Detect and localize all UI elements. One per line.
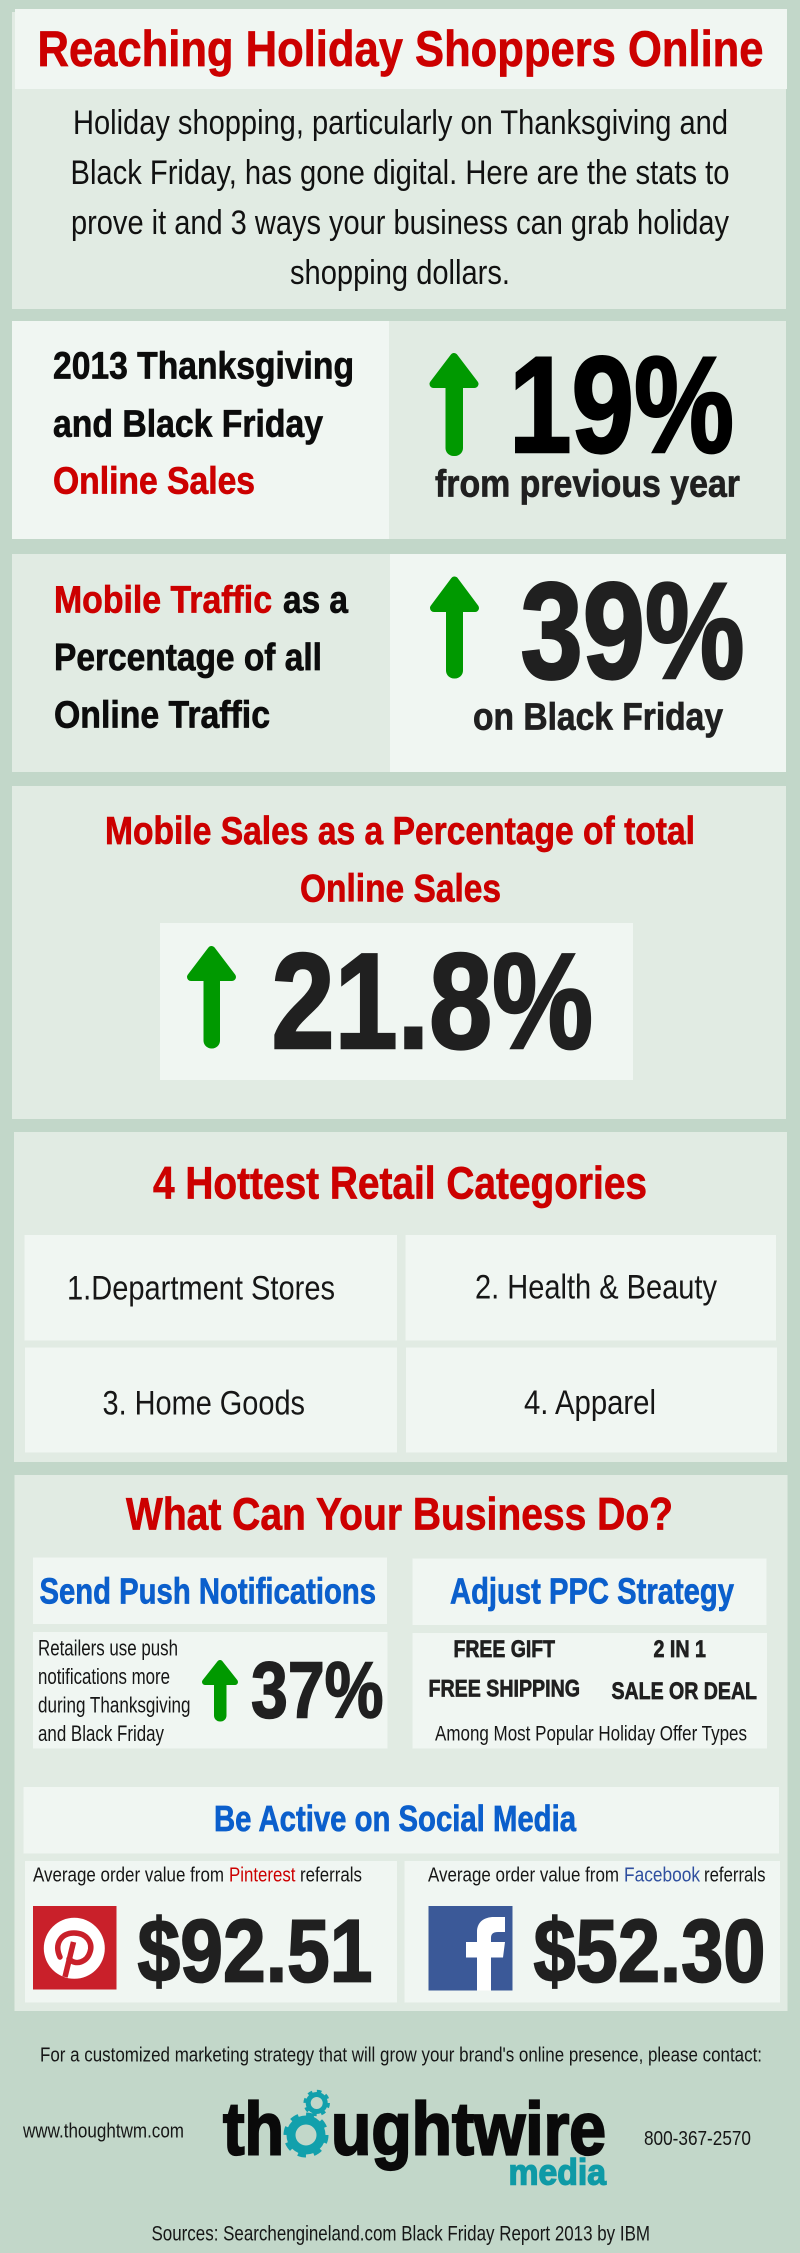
push notification text: Retailers use push [38, 1636, 178, 1660]
section heading: What Can Your Business Do? [126, 1488, 673, 1540]
pinterest caption [33, 1864, 362, 1886]
category: department stores: 1.Department Stores [67, 1270, 335, 1308]
mobile traffic label: as a [283, 580, 349, 622]
panel: online sales stat [12, 321, 786, 539]
icon: up arrow [434, 357, 474, 456]
stat: facebook value: $52.30 [534, 1900, 766, 2000]
pinterest caption: Average order value from [33, 1864, 224, 1886]
stat: 19%: 19% [509, 329, 734, 482]
stat caption: on Black Friday [473, 696, 723, 738]
panel: mobile sales stat [12, 786, 786, 1119]
online sales label: and Black Friday [53, 404, 323, 446]
sub-heading: push notifications [33, 1558, 387, 1624]
stat caption: from previous year [435, 464, 740, 506]
card: pinterest [25, 1861, 397, 2002]
categories heading: 4 Hottest Retail Categories [153, 1158, 647, 1208]
push notification text [38, 1636, 190, 1746]
panel: title and intro [12, 9, 787, 309]
mobile traffic label: Mobile Traffic [54, 580, 272, 622]
icon: small gear [305, 2092, 328, 2114]
mobile sales heading [105, 810, 695, 910]
mobile sales heading: Online Sales [300, 868, 501, 910]
intro text: shopping dollars. [290, 254, 510, 292]
stat: 37%: 37% [251, 1646, 384, 1734]
facebook caption: Average order value from [428, 1864, 619, 1886]
push notification text: and Black Friday [38, 1721, 164, 1746]
icon: up arrow [205, 1663, 235, 1722]
panel: what can your business do [14, 1475, 788, 2011]
card: offer types: FREE GIFT [454, 1636, 555, 1663]
pinterest caption: Pinterest [229, 1864, 296, 1886]
facebook caption: referrals [704, 1864, 766, 1886]
push notification text: notifications more [38, 1664, 170, 1689]
card: offer types: FREE SHIPPING [428, 1676, 580, 1702]
logo: thoughtwire media: media [508, 2152, 607, 2192]
icon: up arrow [191, 950, 232, 1048]
facebook caption [428, 1864, 766, 1886]
footer: website: www.thoughtwm.com [22, 2120, 184, 2142]
panel: mobile traffic stat [12, 554, 786, 772]
category: health and beauty: 2. Health & Beauty [475, 1268, 717, 1306]
mobile traffic label: Online Traffic [54, 694, 270, 736]
category: home goods [25, 1348, 397, 1452]
card: offer types: SALE OR DEAL [612, 1678, 757, 1705]
panel: retail categories [14, 1132, 787, 1462]
category: apparel [406, 1348, 777, 1452]
pinterest caption: referrals [300, 1864, 362, 1886]
category: department stores [24, 1235, 397, 1340]
category: home goods: 3. Home Goods [102, 1384, 305, 1422]
category: apparel: 4. Apparel [524, 1384, 656, 1422]
icon: large gear [286, 2115, 326, 2155]
footer: phone: 800-367-2570 [644, 2128, 751, 2150]
sub-heading: social media [24, 1787, 779, 1854]
mobile traffic label [54, 580, 349, 736]
card: push notification stat [33, 1632, 388, 1748]
mobile traffic label: Percentage of all [54, 637, 322, 679]
logo: thoughtwire media [223, 2088, 607, 2192]
online sales label [53, 346, 354, 502]
logo: thoughtwire media: ughtwire [331, 2088, 606, 2170]
stat: 39%: 39% [520, 555, 744, 708]
icon: up arrow [434, 580, 475, 678]
icon: pinterest [33, 1906, 116, 1990]
stat: pinterest value: $92.51 [138, 1900, 372, 2000]
stat: 21.8%: 21.8% [272, 925, 593, 1077]
logo: thoughtwire media: th [223, 2088, 284, 2170]
card: offer types [412, 1633, 767, 1748]
card: facebook [404, 1861, 780, 2002]
card: offer types: 2 IN 1 [654, 1636, 706, 1663]
footer: sources: Sources: Searchengineland.com Black Friday Report 2013 by IBM [152, 2222, 650, 2246]
icon: facebook [428, 1906, 512, 1990]
facebook caption: Facebook [624, 1864, 701, 1886]
sub-heading: push notifications: Send Push Notifications [40, 1570, 376, 1612]
sub-heading: ppc strategy [412, 1558, 766, 1625]
online sales label: Online Sales [53, 460, 255, 502]
sub-heading: social media: Be Active on Social Media [214, 1798, 577, 1839]
category: health and beauty [406, 1235, 776, 1340]
mobile sales heading: Mobile Sales as a Percentage of total [105, 810, 695, 853]
push notification text: during Thanksgiving [38, 1692, 190, 1718]
stat box [160, 923, 633, 1080]
online sales label: 2013 Thanksgiving [53, 346, 354, 388]
sub-heading: ppc strategy: Adjust PPC Strategy [450, 1570, 734, 1612]
intro text [70, 104, 730, 292]
